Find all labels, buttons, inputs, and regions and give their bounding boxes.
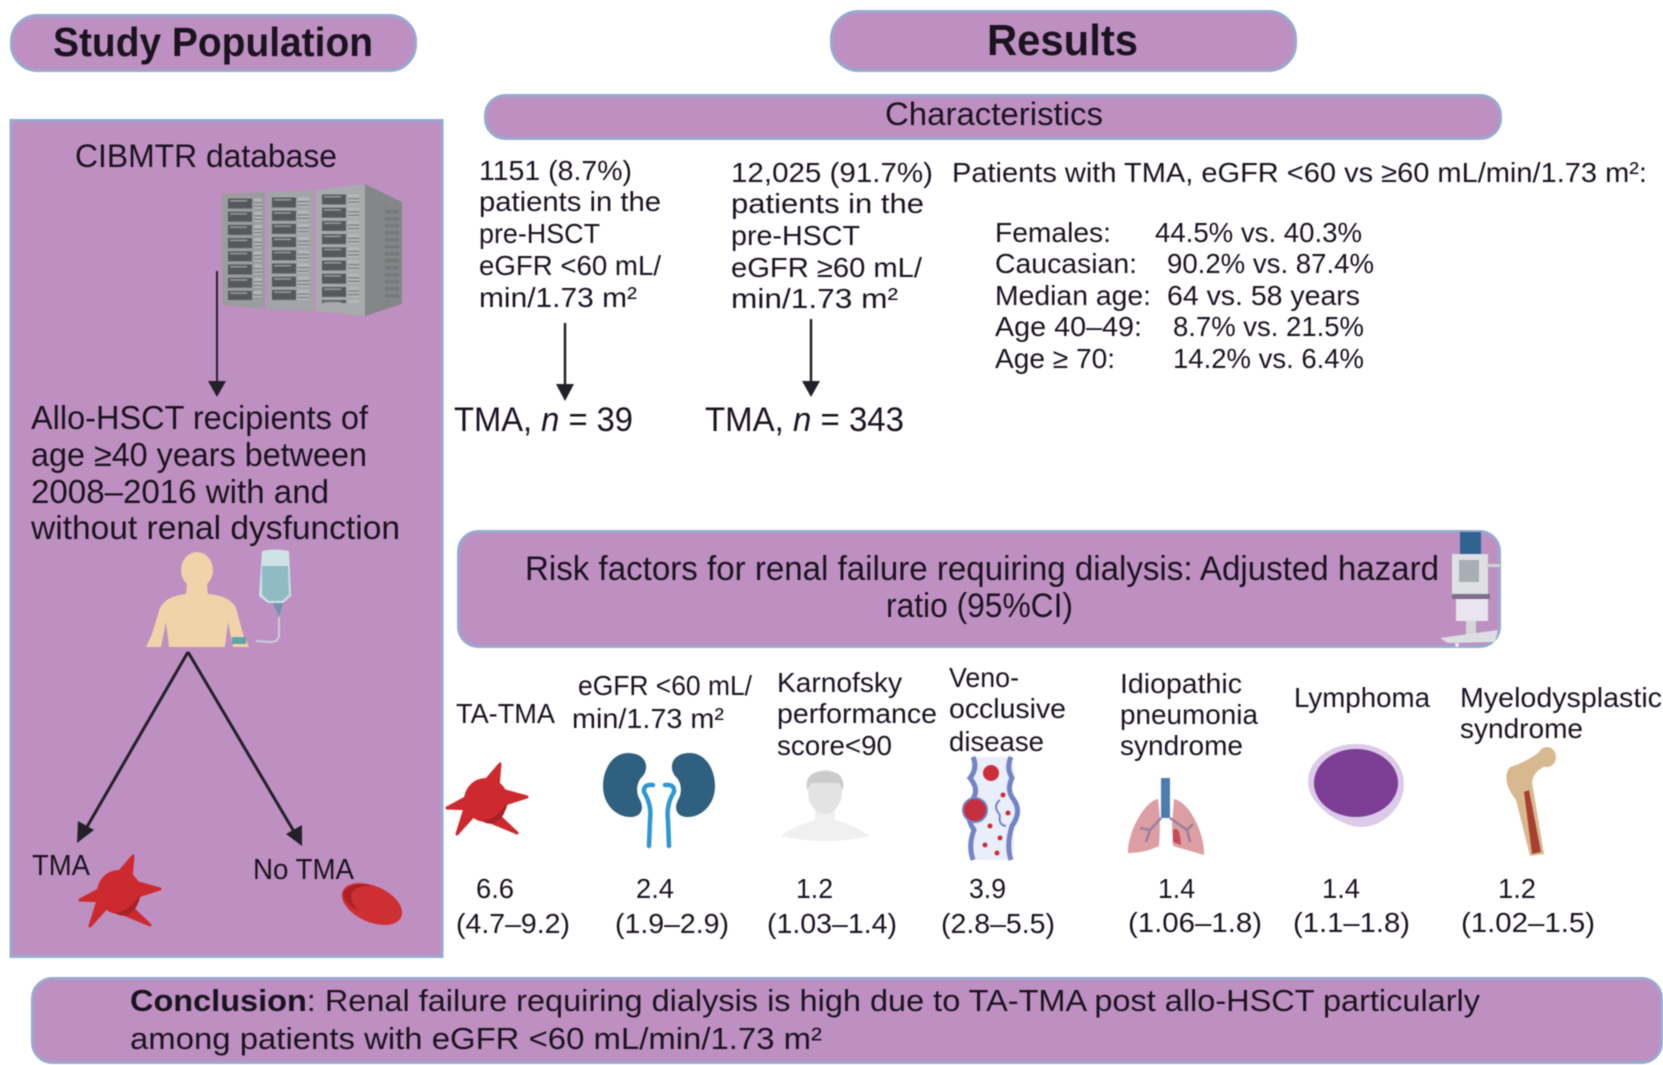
list: patient characteristics: Age 40–49: [995,311,1142,342]
list: patient characteristics: 90.2% vs. 87.4% [1167,248,1374,279]
risk factor: myelodysplastic syndrome: syndrome [1460,713,1583,744]
risk factor: eGFR [572,670,752,939]
list: patient characteristics: 64 vs. 58 years [1167,280,1360,311]
risk factor: lymphoma: 1.4 [1322,873,1360,904]
icon: blood vessel [963,757,1018,860]
text: low eGFR cohort: patients in the [479,186,661,217]
risk factor: eGFR: 2.4 [636,873,674,904]
risk factor: TA-TMA: TA-TMA [456,698,555,729]
panel: risk factors heading: Risk factors for renal failure requiring dialysis: Adjusted hazard [525,550,1439,588]
risk factor: veno-occlusive disease: occlusive [949,693,1066,724]
icon: person portrait [780,770,870,841]
risk factor: veno-occlusive disease: Veno- [949,662,1019,693]
risk factor: Karnofsky score: 1.2 [796,873,833,904]
arrows: to TMA and no TMA [77,652,302,846]
list: patient characteristics [995,217,1374,374]
icon: kidneys [603,753,715,846]
icon: femur bone [1506,747,1556,856]
list: patient characteristics: Age ≥ 70: [995,343,1115,374]
list: patient characteristics: 8.7% vs. 21.5% [1173,311,1364,342]
text: low eGFR cohort: pre-HSCT [479,218,600,249]
panel: risk factors heading [458,532,1500,647]
risk factor: Karnofsky score: performance [777,698,937,729]
risk factor: eGFR: eGFR <60 mL/ [578,670,752,701]
icon: patient with IV bag [146,550,291,647]
risk factor: lymphoma: (1.1–1.8) [1293,907,1410,938]
label: TMA: TMA [32,850,91,882]
text: allo-HSCT recipients: age ≥40 years between [31,436,367,473]
icon: TA-TMA cell [447,764,527,834]
list: patient characteristics: 14.2% vs. 6.4% [1173,343,1364,374]
heading: study population [12,16,416,70]
icon: lungs [1128,778,1204,855]
text: normal eGFR cohort [731,157,933,314]
list: patient characteristics: 44.5% vs. 40.3% [1155,217,1362,248]
risk factor: Karnofsky score: score<90 [777,730,892,761]
risk factor: Karnofsky score [767,667,937,939]
text: patients with TMA heading: Patients with TMA, eGFR <60 vs ≥60 mL/min/1.73 m²: [952,157,1647,188]
list: patient characteristics: Females: [995,217,1111,248]
panel: study population flow [11,120,442,956]
text: allo-HSCT recipients [30,399,400,546]
text: normal eGFR cohort: patients in the [731,188,924,219]
icon: dialysis machine [1440,532,1500,647]
risk factor: veno-occlusive disease: disease [949,726,1044,757]
risk factor: idiopathic pneumonia syndrome: (1.06–1.8) [1128,907,1262,938]
risk factor: idiopathic pneumonia syndrome: syndrome [1120,730,1243,761]
risk factor: eGFR: min/1.73 m² [572,703,724,734]
label: no TMA: No TMA [253,854,355,886]
risk factor: idiopathic pneumonia syndrome [1120,668,1262,938]
panel: risk factors heading: ratio (95%CI) [886,587,1073,625]
panel: conclusion [32,978,1662,1062]
text: allo-HSCT recipients: without renal dysfunction [30,509,400,546]
arrow: normal eGFR to TMA [802,319,820,397]
text: low eGFR cohort [479,155,661,313]
icon: damaged red cell [80,856,160,926]
risk factor: Karnofsky score: Karnofsky [777,667,902,698]
arrow: database to recipients [208,271,226,397]
list: patient characteristics: Median age: [995,280,1151,311]
heading: study population: Study Population [53,19,373,65]
label: TMA n=39: TMA, n = 39 [454,401,633,439]
risk factor: idiopathic pneumonia syndrome: Idiopathic [1120,668,1242,699]
risk factor: myelodysplastic syndrome: Myelodysplastic [1460,682,1662,713]
risk factor: TA-TMA: 6.6 [476,873,514,904]
risk factor: eGFR: (1.9–2.9) [615,908,729,939]
arrow: low eGFR to TMA [556,323,574,401]
risk factor: idiopathic pneumonia syndrome: 1.4 [1158,873,1195,904]
text: normal eGFR cohort: pre-HSCT [731,220,860,251]
text: low eGFR cohort: 1151 (8.7%) [479,155,632,186]
panel: conclusion: among patients with eGFR <60 mL/min/1.73 m² [130,1021,822,1056]
heading: results [832,12,1296,70]
risk factor: myelodysplastic syndrome [1460,682,1662,938]
heading: results: Results [987,16,1138,65]
risk factor: lymphoma [1293,682,1430,938]
risk factor: TA-TMA [447,698,570,939]
heading: characteristics [486,96,1500,138]
list: patient characteristics: Caucasian: [995,248,1137,279]
text: low eGFR cohort: eGFR <60 mL/ [479,250,661,281]
text: normal eGFR cohort: 12,025 (91.7%) [731,157,933,188]
text: allo-HSCT recipients: Allo-HSCT recipients of [31,399,369,436]
icon: normal red cell [335,875,409,933]
icon: lymphoma cell [1308,744,1404,827]
text: low eGFR cohort: min/1.73 m² [479,282,637,313]
risk factor: lymphoma: Lymphoma [1294,682,1430,713]
risk factor: myelodysplastic syndrome: 1.2 [1498,873,1536,904]
risk factor: myelodysplastic syndrome: (1.02–1.5) [1461,907,1595,938]
text: allo-HSCT recipients: 2008–2016 with and [31,473,329,510]
icon: server racks [222,184,402,316]
risk factor: idiopathic pneumonia syndrome: pneumonia [1120,699,1258,730]
label: TMA n=343: TMA, n = 343 [705,401,904,439]
panel: conclusion: Conclusion : Renal failure requiring dialysis is high due to TA-TMA post allo-HSCT particularly [130,983,1481,1018]
heading: characteristics: Characteristics [885,96,1103,132]
text: normal eGFR cohort: eGFR ≥60 mL/ [731,252,922,283]
risk factor: Karnofsky score: (1.03–1.4) [767,908,897,939]
risk factor: veno-occlusive disease: (2.8–5.5) [941,908,1055,939]
risk factor: TA-TMA: (4.7–9.2) [456,908,570,939]
risk factor: veno-occlusive disease [941,662,1066,939]
label: CIBMTR database: CIBMTR database [75,138,337,174]
text: normal eGFR cohort: min/1.73 m² [731,283,898,314]
risk factor: veno-occlusive disease: 3.9 [969,873,1006,904]
